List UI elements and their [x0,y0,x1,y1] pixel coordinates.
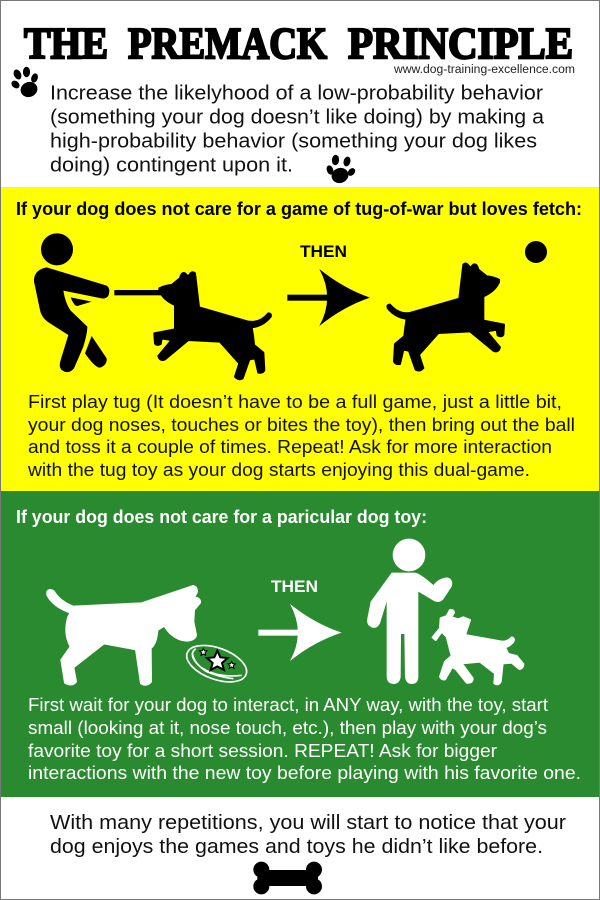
title: PRINCIPLE [348,19,573,68]
closing text: With many repetitions, you will start to notice that your [50,812,566,834]
yellow body text: First play tug (It doesn’t have to be a full game, just a little bit, [28,392,562,412]
intro text [50,82,545,176]
icon: ball [525,241,547,263]
title [24,19,573,68]
website url: www.dog-training-excellence.com [393,64,575,76]
intro text: (something your dog doesn’t like doing) by making a [50,106,545,128]
icon: paw print top left [10,67,40,99]
green body text [28,695,581,783]
closing text [50,812,566,858]
panel: green dog toy section [0,491,600,797]
icon: dog tugging [154,272,271,379]
label: THEN (yellow): THEN [300,242,347,261]
icon: small dog with toy in mouth [433,610,523,684]
icon: standing person [367,539,452,684]
title: THE [24,19,108,68]
intro text: Increase the likelyhood of a low-probability behavior [50,82,543,104]
yellow body text [27,392,575,480]
label: THEN (green): THEN [271,577,318,596]
arrow: green section [258,604,342,661]
icon: dog leaping [387,264,504,371]
icon: dog sniffing [47,586,200,685]
intro text: high-probability behavior (something your dog likes [50,130,537,152]
icon: frisbee with stars [182,638,251,689]
green body text: interactions with the new toy before playing with his favorite one. [28,763,581,783]
heading: dog toy: If your dog does not care for a paricular dog toy: [16,506,427,527]
panel: yellow tug-of-war section [0,187,600,491]
yellow body text: with the tug toy as your dog starts enjoying this dual-game. [27,460,530,480]
yellow body text: and toss it a couple of times. Repeat! Ask for more interaction [28,437,552,457]
green body text: favorite toy for a short session. REPEAT! Ask for bigger [28,741,497,761]
icon: bone [253,862,322,894]
heading: tug-of-war: If your dog does not care for a game of tug-of-war but loves fetch: [16,198,582,219]
green body text: First wait for your dog to interact, in ANY way, with the toy, start [28,695,548,715]
green body text: small (looking at it, nose touch, etc.), then play with your dog’s [28,718,547,738]
closing text: dog enjoys the games and toys he didn’t like before. [50,836,543,858]
arrow: yellow section [287,269,370,326]
icon: person pulling tug toy [34,233,164,372]
title: PREMACK [128,19,327,68]
intro text: doing) contingent upon it. [50,154,293,176]
yellow body text: your dog noses, touches or bites the toy), then bring out the ball [28,415,575,435]
icon: paw print under intro [325,155,357,185]
